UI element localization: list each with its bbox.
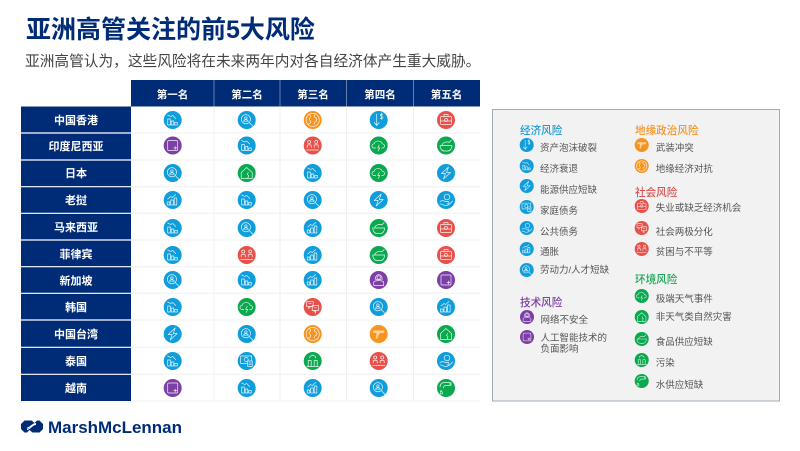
- header row: 第二名: [231, 88, 263, 101]
- header row: 第一名: [157, 88, 188, 101]
- legend: social risks: 失业或缺乏经济机会: [656, 202, 742, 214]
- economy name column: 泰国: [65, 354, 87, 368]
- header row: [131, 80, 480, 106]
- ranking table: [21, 80, 480, 401]
- legend: environmental risks: 水供应短缺: [656, 379, 704, 391]
- legend: economic risks: 劳动力/人才短缺: [540, 264, 610, 276]
- legend: environmental risks: 污染: [656, 357, 675, 369]
- legend: social risks: 社会风险: [635, 186, 678, 199]
- legend: environmental risks: [635, 273, 732, 391]
- legend: economic risks: 经济衰退: [540, 163, 579, 175]
- subtitle: 亚洲高管认为，这些风险将在未来两年内对各自经济体产生重大威胁。: [25, 53, 480, 70]
- economy name column: 印度尼西亚: [48, 139, 104, 153]
- grid lines: [131, 106, 480, 401]
- economy name column: 韩国: [65, 300, 87, 314]
- economy name column: 日本: [65, 166, 87, 180]
- legend: economic risks: 资产泡沫破裂: [540, 142, 598, 154]
- legend: technology risks: 技术风险: [520, 296, 563, 309]
- legend: geopolitical risks: [635, 124, 713, 175]
- economy name column: 中国香港: [54, 113, 98, 127]
- legend: economic risks: [520, 124, 610, 277]
- economy name column: 中国台湾: [54, 327, 98, 341]
- legend: technology risks: 人工智能技术的: [540, 332, 607, 344]
- legend: technology risks: [520, 296, 607, 355]
- legend: environmental risks: 非天气类自然灾害: [656, 311, 732, 323]
- economy name column: 老挝: [65, 193, 87, 207]
- economy name column: 菲律宾: [60, 247, 92, 261]
- legend panel: [492, 110, 780, 401]
- logo: Marsh McLennan: MarshMcLennan: [48, 418, 182, 437]
- title: 亚洲高管关注的前5大风险: [26, 16, 315, 44]
- legend: environmental risks: 极端天气事件: [656, 293, 713, 305]
- legend: geopolitical risks: 地缘政治风险: [635, 124, 699, 137]
- header row: 第五名: [431, 88, 462, 101]
- legend: economic risks: 通胀: [540, 247, 560, 258]
- legend: social risks: [635, 186, 742, 258]
- legend: economic risks: 公共债务: [540, 226, 579, 238]
- legend: social risks: 社会两极分化: [656, 226, 713, 238]
- risk icons grid: [164, 111, 455, 397]
- legend: geopolitical risks: 武装冲突: [656, 142, 694, 154]
- legend: economic risks: 经济风险: [520, 124, 563, 137]
- economy name column: 新加坡: [60, 274, 92, 288]
- legend: environmental risks: 食品供应短缺: [656, 336, 713, 348]
- legend: technology risks: 负面影响: [540, 343, 579, 355]
- economy name column: [21, 106, 131, 401]
- legend: geopolitical risks: 地缘经济对抗: [656, 163, 713, 175]
- legend: environmental risks: 环境风险: [635, 273, 678, 286]
- header row: 第三名: [297, 88, 329, 101]
- economy name column: 马来西亚: [54, 220, 98, 234]
- legend: social risks: 贫困与不平等: [656, 246, 713, 258]
- legend: technology risks: 网络不安全: [540, 314, 589, 326]
- legend: economic risks: 家庭债务: [540, 205, 579, 217]
- header row: 第四名: [364, 88, 396, 101]
- legend: economic risks: 能源供应短缺: [540, 184, 598, 196]
- economy name column: 越南: [65, 381, 87, 395]
